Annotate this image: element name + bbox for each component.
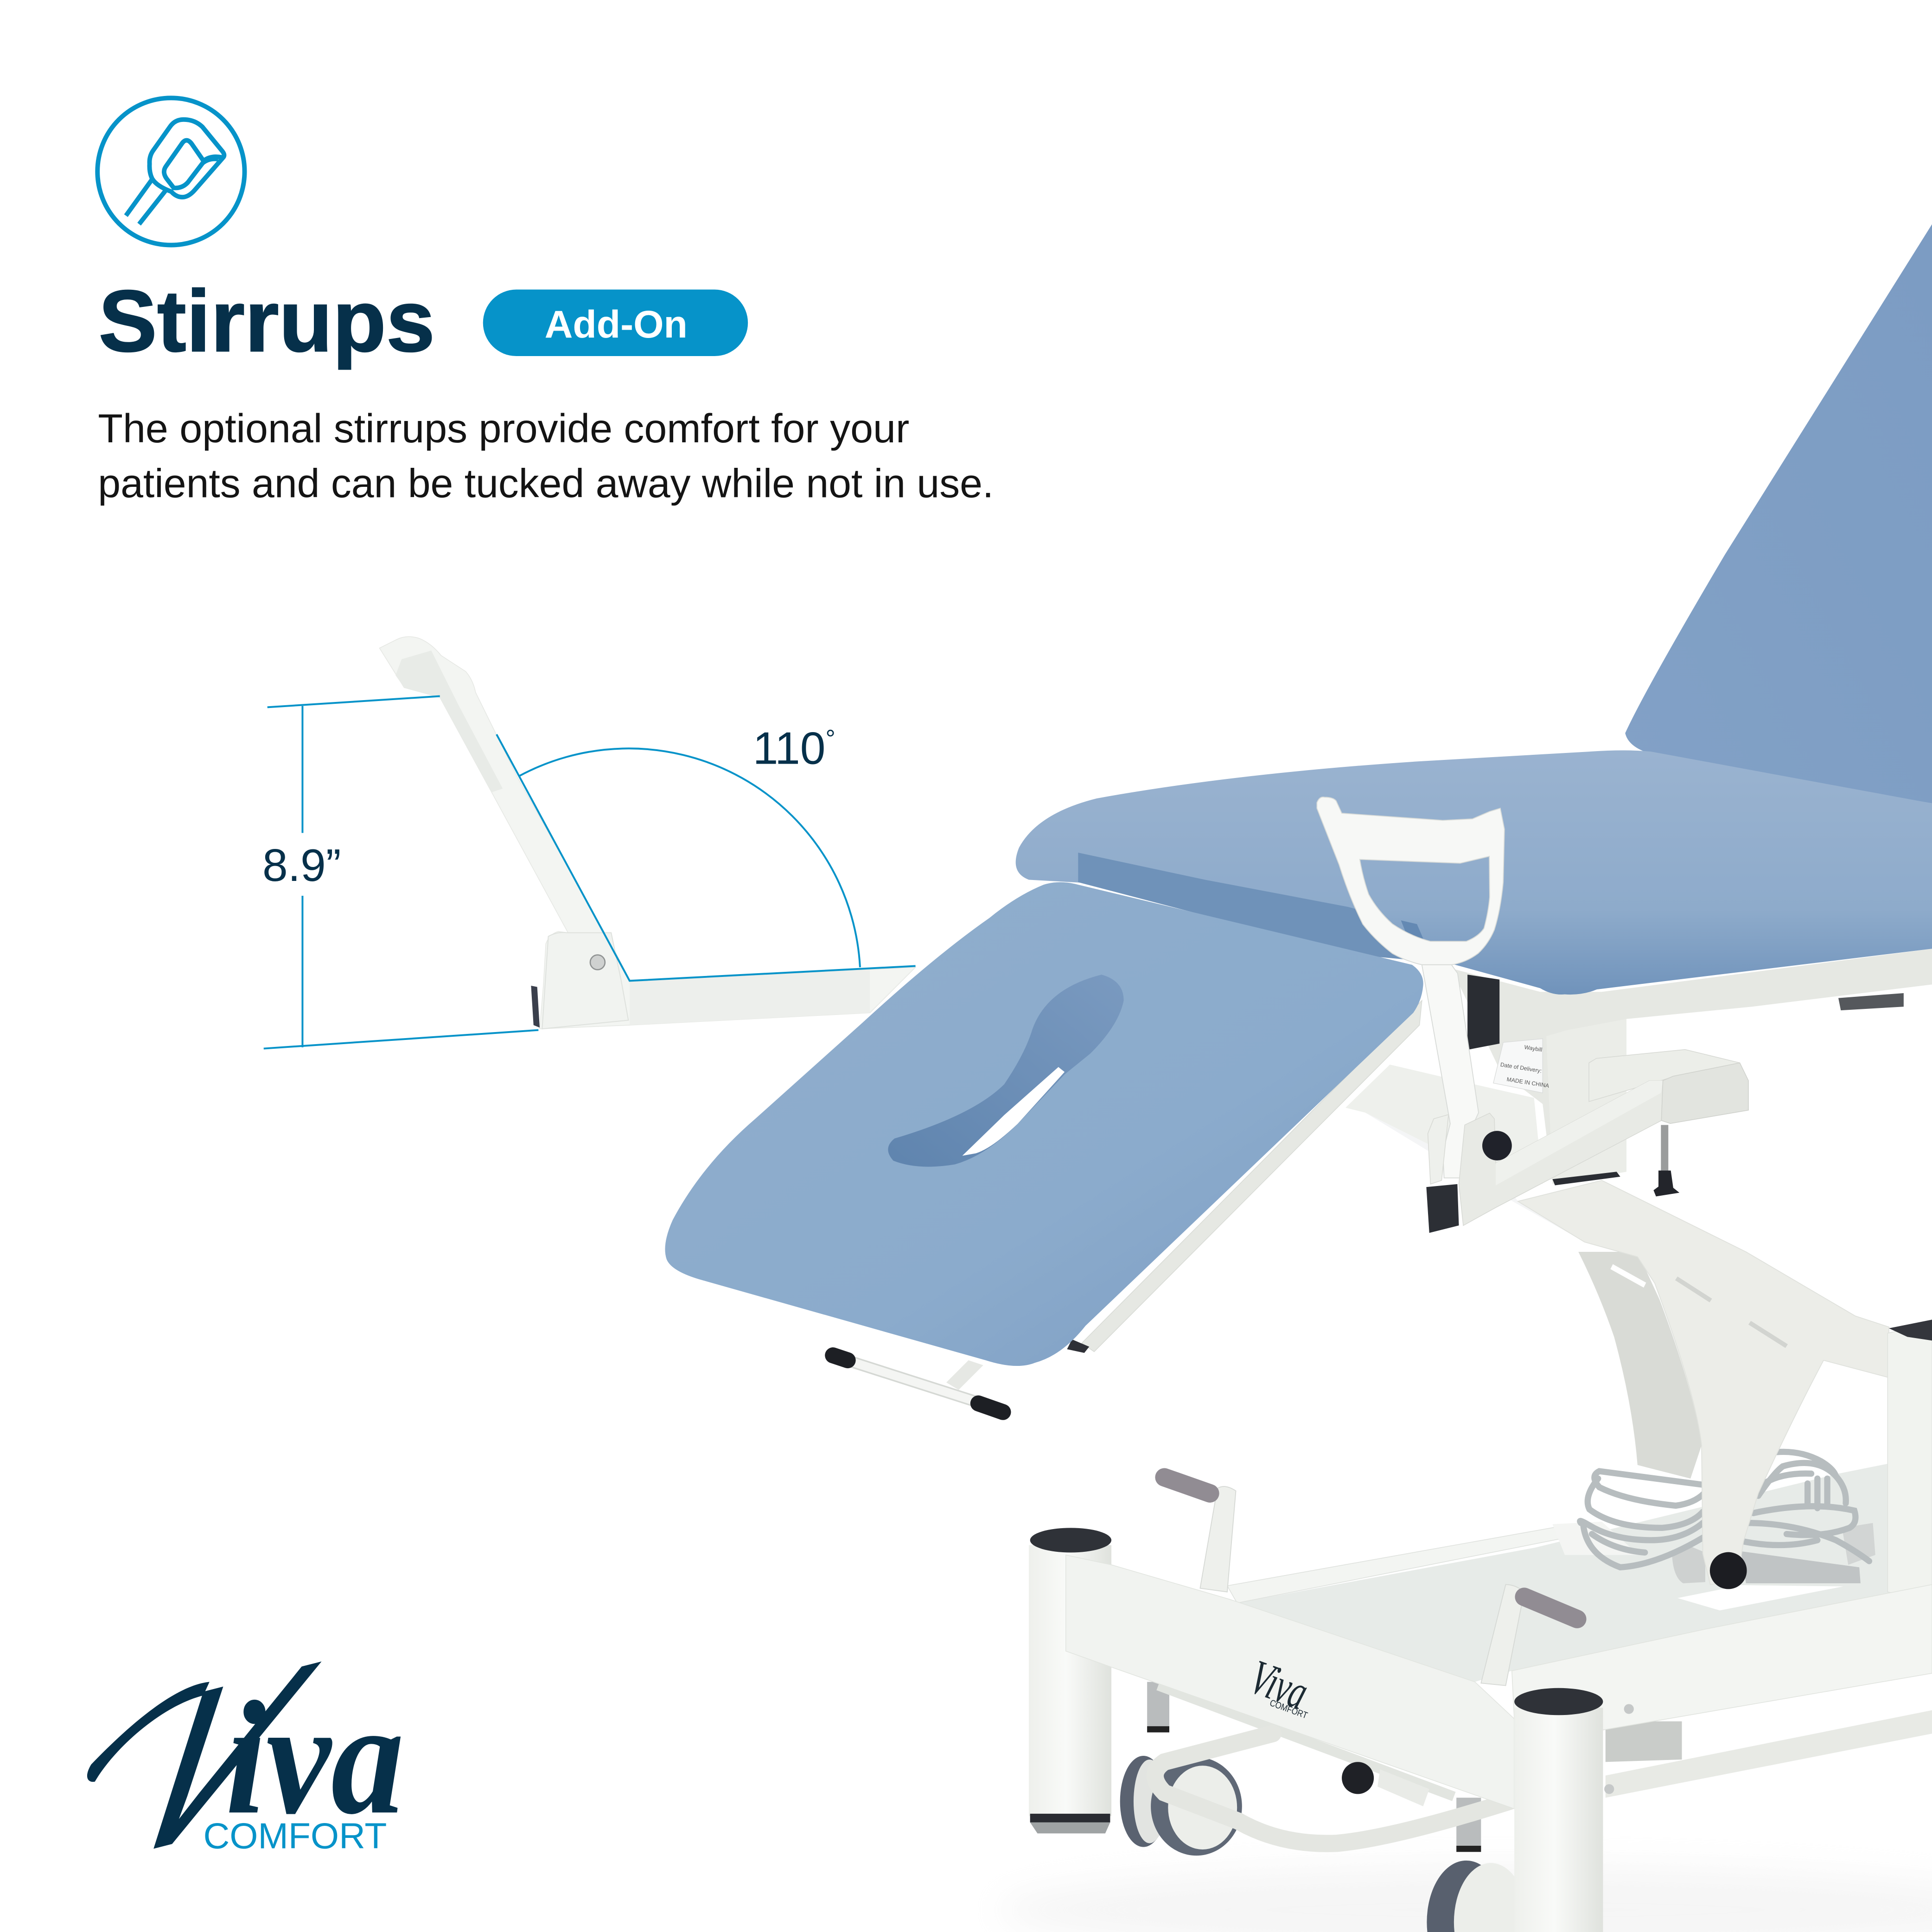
left caster wheel xyxy=(1120,1682,1242,1855)
ground shadow xyxy=(998,1865,1932,1932)
height dimension lines xyxy=(264,696,538,1049)
serial label: Date of Delivery: xyxy=(1500,1061,1542,1074)
stirrup folded detail illustration xyxy=(380,637,916,1029)
seat cushion xyxy=(1016,750,1932,995)
brand logo: iva xyxy=(225,1667,404,1848)
foot cushion recess xyxy=(888,975,1124,1167)
leg stirrup on table xyxy=(1317,797,1505,1178)
angle label: ° xyxy=(825,725,835,752)
description text: The optional stirrups provide comfort for your xyxy=(98,406,909,451)
right front handle xyxy=(1481,1585,1577,1685)
foot bar handle xyxy=(833,1355,1003,1412)
serial label xyxy=(1493,1039,1556,1093)
left post xyxy=(1029,1528,1111,1833)
serial label: MADE IN CHINA xyxy=(1506,1076,1550,1089)
serial label: Waybill xyxy=(1524,1044,1543,1053)
description text: patients and can be tucked away while not in use. xyxy=(98,460,994,506)
height label: 8.9” xyxy=(262,840,341,891)
badge: Add-On xyxy=(483,290,748,356)
angle label: 110 xyxy=(753,723,825,774)
beam logo: Viva xyxy=(1243,1649,1315,1720)
front crossbeam xyxy=(1066,1555,1514,1809)
title: Stirrups xyxy=(99,272,435,370)
beam logo: COMFORT xyxy=(1269,1698,1309,1721)
right beam and lower rail xyxy=(1512,1585,1932,1798)
power cable coil xyxy=(1580,1452,1869,1567)
pedal link bar xyxy=(1158,1685,1454,1806)
brand logo: COMFORT xyxy=(203,1815,387,1856)
loop pedal tube xyxy=(1155,1734,1509,1843)
icon: stirrup in circle xyxy=(97,98,245,245)
backrest cushion xyxy=(1625,224,1932,803)
side clamp arm xyxy=(1426,1050,1748,1233)
actuator xyxy=(1672,1523,1875,1583)
near post xyxy=(1514,1688,1634,1932)
foot cushion xyxy=(665,882,1423,1366)
right caster wheel xyxy=(1427,1798,1528,1932)
description text xyxy=(98,406,994,506)
footrest frame strip xyxy=(1067,1001,1422,1353)
rear column xyxy=(1887,1320,1932,1602)
under-seat frame xyxy=(1452,949,1932,1186)
lift mechanism rear xyxy=(1345,1065,1702,1479)
base rail and floor xyxy=(1227,1454,1932,1682)
badge: Add-On: Add-On xyxy=(545,302,688,346)
brand logo: V xyxy=(76,1611,351,1911)
lift arm and front plate xyxy=(1518,1180,1889,1589)
left rear handle xyxy=(1164,1477,1236,1592)
angle arc lines xyxy=(497,734,916,981)
beam logo xyxy=(1243,1649,1315,1721)
